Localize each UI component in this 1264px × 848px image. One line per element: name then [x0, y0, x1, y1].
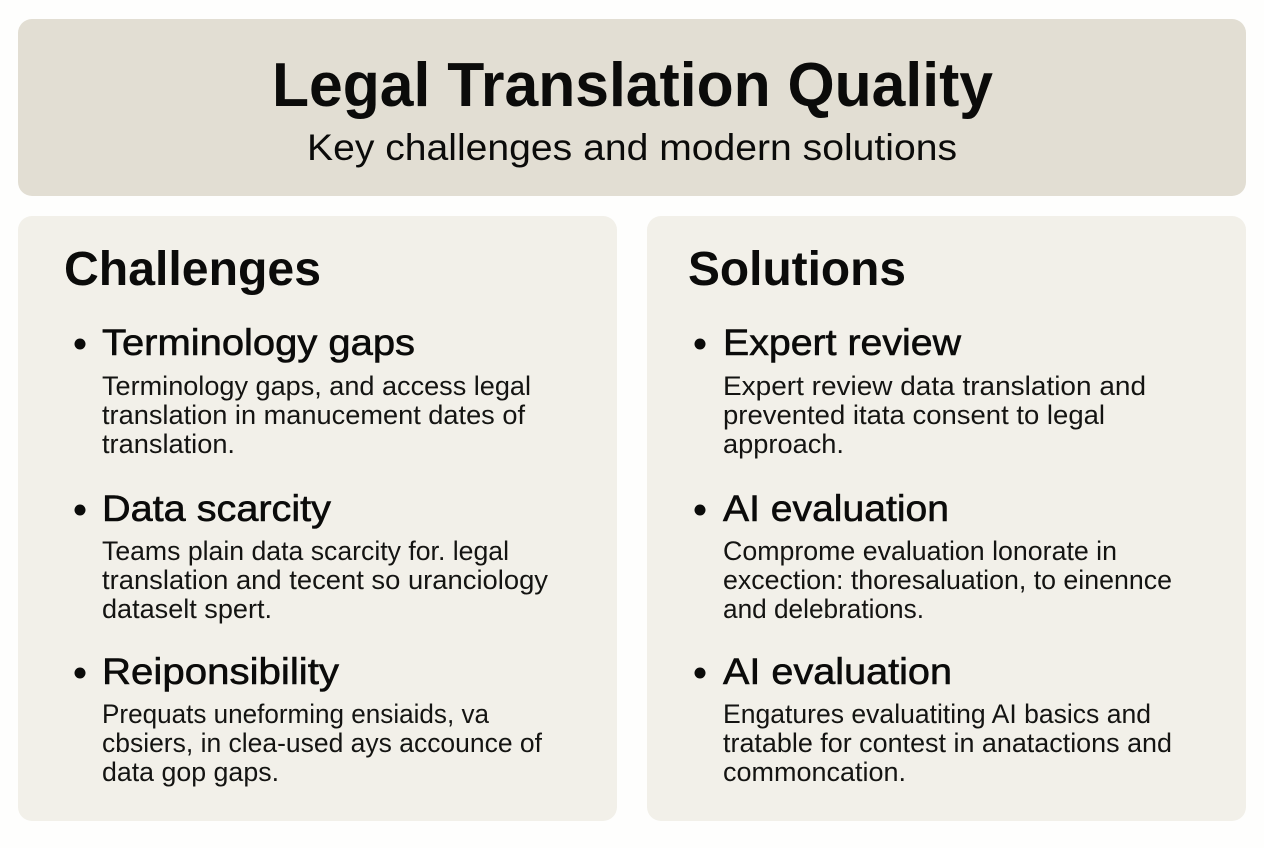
item: ai evaluation second: AI evaluation — [723, 651, 952, 692]
panel: challenges — [18, 216, 617, 821]
item: expert review: prevented itata consent to legal — [723, 400, 1105, 430]
panel: solutions — [647, 216, 1246, 821]
subtitle: Key challenges and modern solutions — [307, 127, 957, 168]
heading: solutions: Solutions — [688, 243, 906, 296]
item: terminology gaps: translation. — [102, 429, 235, 459]
item: ai evaluation second: commoncation. — [723, 757, 906, 787]
item: terminology gaps: Terminology gaps — [102, 322, 415, 363]
item: responsibility: Reiponsibility — [102, 651, 340, 692]
item: ai evaluation: AI evaluation — [723, 488, 949, 529]
item: ai evaluation — [694, 488, 1172, 624]
item: terminology gaps: Terminology gaps, and access legal — [102, 371, 531, 401]
item: ai evaluation: Comprome evaluation lonorate in — [723, 536, 1117, 566]
item: ai evaluation: excection: thoresaluation, to einennce — [723, 565, 1172, 595]
item: responsibility — [74, 651, 543, 787]
item: ai evaluation: and delebrations. — [723, 594, 924, 624]
item: responsibility: data gop gaps. — [102, 757, 279, 787]
item: terminology gaps — [74, 322, 531, 459]
item: ai evaluation second: tratable for contest in anatactions and — [723, 728, 1172, 758]
item: expert review: approach. — [723, 429, 844, 459]
item: expert review: Expert review data translation and — [723, 371, 1146, 401]
item: data scarcity: dataselt spert. — [102, 594, 272, 624]
title: Legal Translation Quality — [272, 51, 994, 120]
item: data scarcity: translation and tecent so uranciology — [102, 565, 549, 595]
heading: challenges: Challenges — [64, 243, 321, 296]
item: data scarcity: Data scarcity — [102, 488, 332, 529]
item: responsibility: cbsiers, in clea-used ays accounce of — [102, 728, 543, 758]
item: data scarcity — [74, 488, 549, 624]
item: ai evaluation second — [694, 651, 1172, 787]
item: responsibility: Prequats uneforming ensiaids, va — [102, 699, 489, 729]
item: ai evaluation second: Engatures evaluatiting AI basics and — [723, 699, 1151, 729]
item: terminology gaps: translation in manucement dates of — [102, 400, 526, 430]
item: data scarcity: Teams plain data scarcity for. legal — [102, 536, 509, 566]
header banner — [18, 19, 1246, 196]
item: expert review — [694, 322, 1146, 459]
item: expert review: Expert review — [723, 322, 961, 363]
